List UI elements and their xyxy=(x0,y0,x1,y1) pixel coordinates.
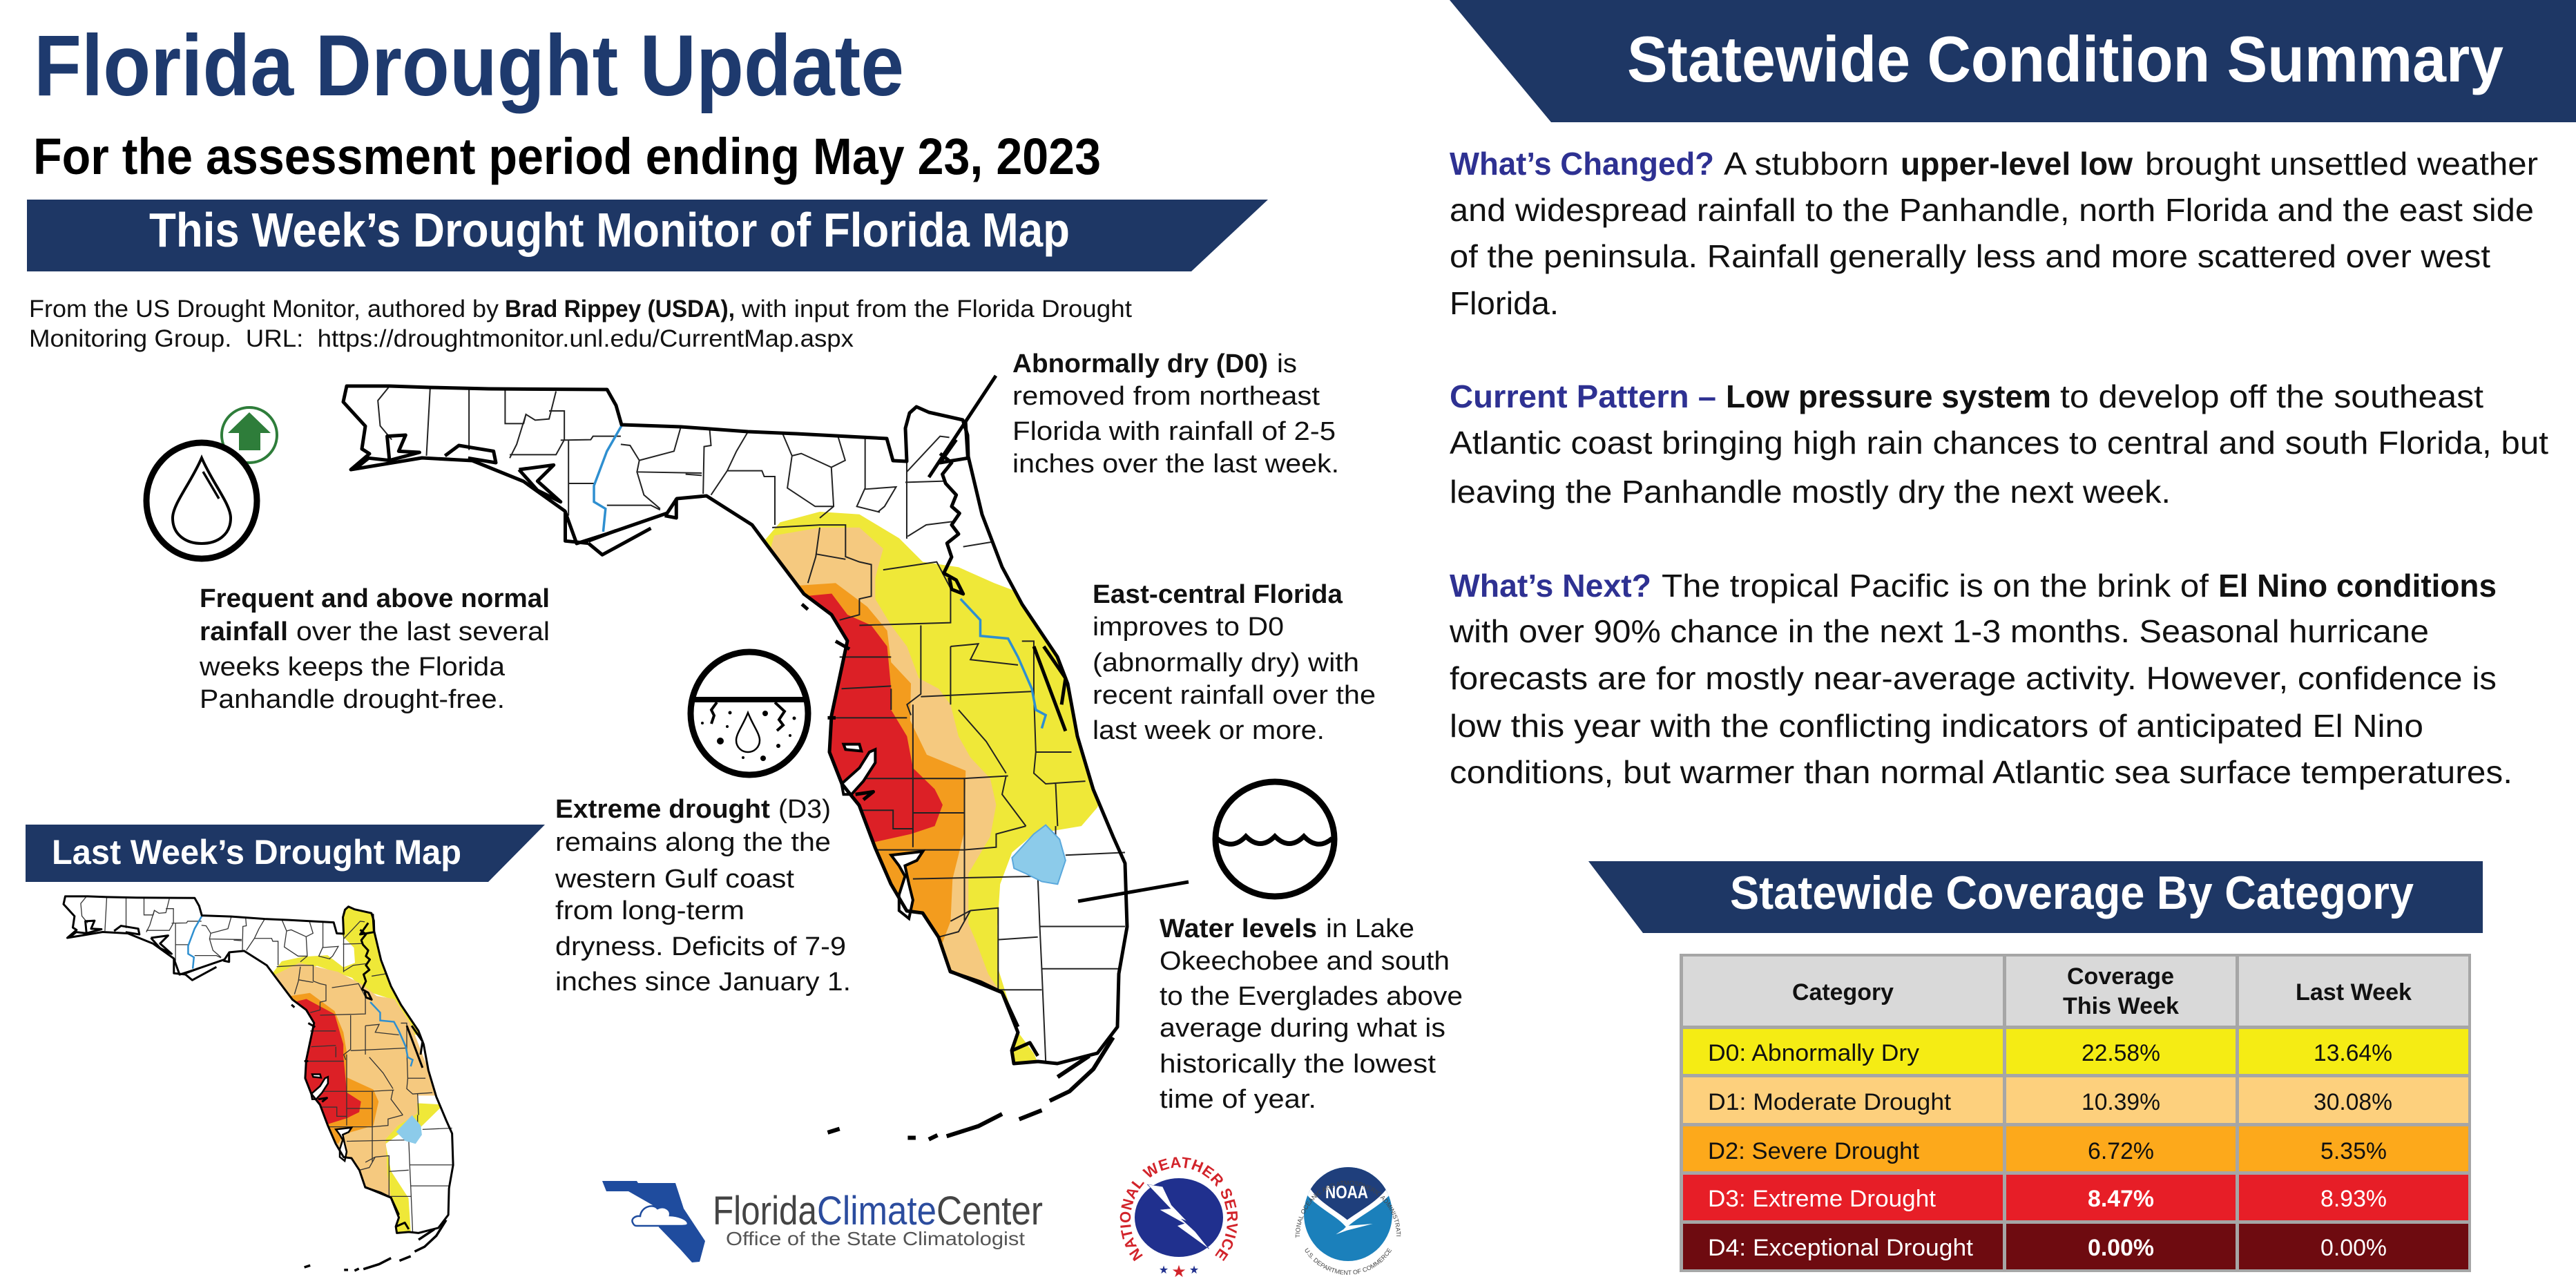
callout: extreme drought: from long-term xyxy=(555,896,744,925)
callout: east-central Florida xyxy=(1093,580,1376,745)
assessment period subtitle: For the assessment period ending May 23, 2023 xyxy=(33,128,1101,185)
text block: what's next: conditions, but warmer than normal Atlantic sea surface temperatures. xyxy=(1450,754,2512,790)
row D0: 13.64% xyxy=(2314,1040,2392,1066)
callout: abnormally dry xyxy=(929,349,1339,479)
logo: Florida Climate Center xyxy=(602,1181,1043,1262)
source note: with input from the Florida Drought xyxy=(741,296,1132,323)
logo: NOAA: NATIONAL OCEANIC AND ATMOSPHERIC ADMINISTRATION xyxy=(1296,1181,1401,1238)
text block: current pattern: leaving the Panhandle mostly dry the next week. xyxy=(1450,474,2171,510)
county lines xyxy=(378,386,1125,1061)
callout: abnormally dry: is xyxy=(1277,349,1297,378)
row D4: D4: Exceptional Drought xyxy=(1708,1235,1974,1261)
map: last week's drought xyxy=(64,896,453,1271)
callout: abnormally dry: removed from northeast xyxy=(1012,382,1320,411)
callout: extreme drought: inches since January 1. xyxy=(555,968,851,997)
source note xyxy=(29,296,1132,352)
callout: abnormally dry: Abnormally dry (D0) xyxy=(1012,349,1268,378)
table header row: Coverage xyxy=(2067,963,2174,990)
row D3: 8.47% xyxy=(2088,1186,2154,1212)
text block: current pattern: Atlantic coast bringing high rain chances to central and south Florida, but xyxy=(1450,425,2548,461)
Lake Okeechobee xyxy=(1012,825,1066,884)
source note: From the US Drought Monitor, authored by xyxy=(29,296,499,323)
icon: water level xyxy=(1215,782,1334,896)
callout: extreme drought: western Gulf coast xyxy=(555,865,794,894)
callout: east-central Florida: improves to D0 xyxy=(1093,613,1284,642)
callout: east-central Florida: East-central Florida xyxy=(1093,580,1343,609)
logo: NOAA: U.S. DEPARTMENT OF COMMERCE xyxy=(1305,1247,1392,1275)
callout: abnormally dry: Florida with rainfall of 2-5 xyxy=(1012,417,1336,446)
callout: water levels: to the Everglades above xyxy=(1160,982,1463,1011)
banner: this week's map xyxy=(27,200,1268,271)
table header row: Category xyxy=(1792,979,1894,1006)
logo: Florida Climate Center: Climate xyxy=(817,1189,936,1233)
text block: Panhandle rainfall: weeks keeps the Florida xyxy=(199,653,506,682)
icon: green up arrow xyxy=(222,407,277,463)
source note: Monitoring Group. URL: https://droughtmonitor.unl.edu/CurrentMap.aspx xyxy=(29,325,854,352)
row D4 xyxy=(1683,1224,2468,1269)
text block: what's next: low this year with the conflicting indicators of anticipated El Nino xyxy=(1450,708,2423,744)
text block: what's changed xyxy=(1450,146,2538,321)
callout: east-central Florida: (abnormally dry) with xyxy=(1093,648,1359,677)
text block: what's changed: brought unsettled weather xyxy=(2145,146,2538,182)
row D0: 22.58% xyxy=(2082,1040,2160,1066)
text block: current pattern: Current Pattern – xyxy=(1450,378,1716,414)
text block: what's next xyxy=(1449,568,2512,790)
logo: Florida Climate Center: Florida xyxy=(713,1189,818,1233)
callout: water levels: in Lake xyxy=(1326,914,1414,943)
row D4: 0.00% xyxy=(2088,1235,2154,1261)
banner: last week's map xyxy=(26,825,545,882)
logo: NOAA xyxy=(1296,1167,1401,1275)
callout: extreme drought: (D3) xyxy=(778,795,831,824)
text block: Panhandle rainfall: over the last several xyxy=(296,617,550,646)
drought zones: last week xyxy=(273,907,441,1232)
callout: water levels: average during what is xyxy=(1160,1014,1445,1043)
banner: statewide coverage by category xyxy=(1588,861,2483,933)
text block: what's next: forecasts are for mostly near-average activity. However, confidence is xyxy=(1450,660,2497,696)
callout: water levels: Water levels xyxy=(1160,914,1317,943)
row D1 xyxy=(1683,1077,2468,1123)
logo: National Weather Service: ★ xyxy=(1189,1263,1199,1276)
banner: last week's map: Last Week’s Drought Map xyxy=(52,833,461,872)
table header row: Last Week xyxy=(2296,979,2412,1006)
logo: NOAA: NOAA xyxy=(1325,1182,1368,1202)
text block: what's changed: upper-level low xyxy=(1901,146,2133,182)
text block: current pattern xyxy=(1450,378,2548,510)
logo: National Weather Service: ★ xyxy=(1159,1263,1169,1276)
icon: Florida shape with cloud xyxy=(602,1181,705,1262)
callout: east-central Florida: last week or more. xyxy=(1093,716,1325,745)
map: this week's drought monitor of Florida xyxy=(343,386,1127,1140)
row D2: D2: Severe Drought xyxy=(1708,1138,1920,1164)
row D2 xyxy=(1683,1126,2468,1171)
text block: current pattern: Low pressure system xyxy=(1726,378,2051,414)
text block: current pattern: to develop off the southeast xyxy=(2060,378,2483,414)
banner: statewide coverage by category: Statewide Coverage By Category xyxy=(1730,867,2414,919)
text block: what's next: with over 90% chance in the next 1-3 months. Seasonal hurricane xyxy=(1449,613,2429,649)
row D1: D1: Moderate Drought xyxy=(1708,1089,1952,1115)
row D3 xyxy=(1683,1175,2468,1220)
banner: statewide condition summary: Statewide Condition Summary xyxy=(1627,23,2503,95)
banner: this week's map: This Week’s Drought Monitor of Florida Map xyxy=(149,203,1070,257)
callout: extreme drought: remains along the the xyxy=(555,828,831,857)
callout: extreme drought xyxy=(555,795,851,997)
text block: Panhandle rainfall xyxy=(199,584,550,714)
text block: what's changed: A stubborn xyxy=(1724,146,1889,182)
drought zones: this week xyxy=(765,512,1098,1062)
row D3: 8.93% xyxy=(2320,1186,2387,1212)
text block: what's next: What’s Next? xyxy=(1450,568,1651,604)
row D0: D0: Abnormally Dry xyxy=(1708,1040,1919,1066)
text block: what's next: El Nino conditions xyxy=(2218,568,2497,604)
row D2: 5.35% xyxy=(2320,1138,2387,1164)
table header row xyxy=(1683,957,2468,1026)
row D2: 6.72% xyxy=(2088,1138,2154,1164)
text block: what's next: The tropical Pacific is on the brink of xyxy=(1662,568,2209,604)
table header row: This Week xyxy=(2063,993,2179,1019)
callout: water levels xyxy=(1078,882,1463,1114)
callout: water levels: historically the lowest xyxy=(1160,1050,1436,1079)
row D0 xyxy=(1683,1029,2468,1074)
text block: Panhandle rainfall: Frequent and above normal xyxy=(200,584,550,613)
text block: Panhandle rainfall: rainfall xyxy=(200,617,288,646)
row D4: 0.00% xyxy=(2320,1235,2387,1261)
icon: rainfall drop with up arrow xyxy=(146,407,277,559)
row D3: D3: Extreme Drought xyxy=(1708,1186,1936,1212)
logo: Florida Climate Center: Office of the State Climatologist xyxy=(726,1228,1025,1249)
source note: Brad Rippey (USDA), xyxy=(505,296,735,323)
rivers xyxy=(594,425,1046,729)
text block: what's changed: What’s Changed? xyxy=(1450,146,1714,182)
logo: Florida Climate Center: Center xyxy=(936,1189,1043,1233)
callout: water levels: time of year. xyxy=(1160,1085,1316,1114)
banner: statewide condition summary xyxy=(1450,0,2576,122)
icon: drought soil with drop xyxy=(691,652,808,775)
callout: east-central Florida: recent rainfall over the xyxy=(1093,681,1376,710)
table: coverage by category xyxy=(1680,954,2471,1272)
text block: what's changed: of the peninsula. Rainfall generally less and more scattered over west xyxy=(1450,238,2490,274)
callout: extreme drought: Extreme drought xyxy=(555,795,770,824)
logo: National Weather Service: ★ xyxy=(1171,1262,1186,1281)
callout: water levels: Okeechobee and south xyxy=(1160,947,1450,976)
text block: what's changed: and widespread rainfall to the Panhandle, north Florida and the east side xyxy=(1450,192,2534,228)
title: Florida Drought Update xyxy=(34,18,904,114)
Lake Okeechobee xyxy=(396,1115,422,1144)
text block: Panhandle rainfall: Panhandle drought-free. xyxy=(200,685,505,714)
text block: what's changed: Florida. xyxy=(1450,285,1559,321)
row D1: 10.39% xyxy=(2082,1089,2160,1115)
logo: National Weather Service: NATIONAL WEATHER SERVICE xyxy=(1120,1157,1238,1261)
callout: abnormally dry: inches over the last week. xyxy=(1012,450,1339,479)
row D1: 30.08% xyxy=(2314,1089,2392,1115)
callout: extreme drought: dryness. Deficits of 7-9 xyxy=(555,932,846,961)
